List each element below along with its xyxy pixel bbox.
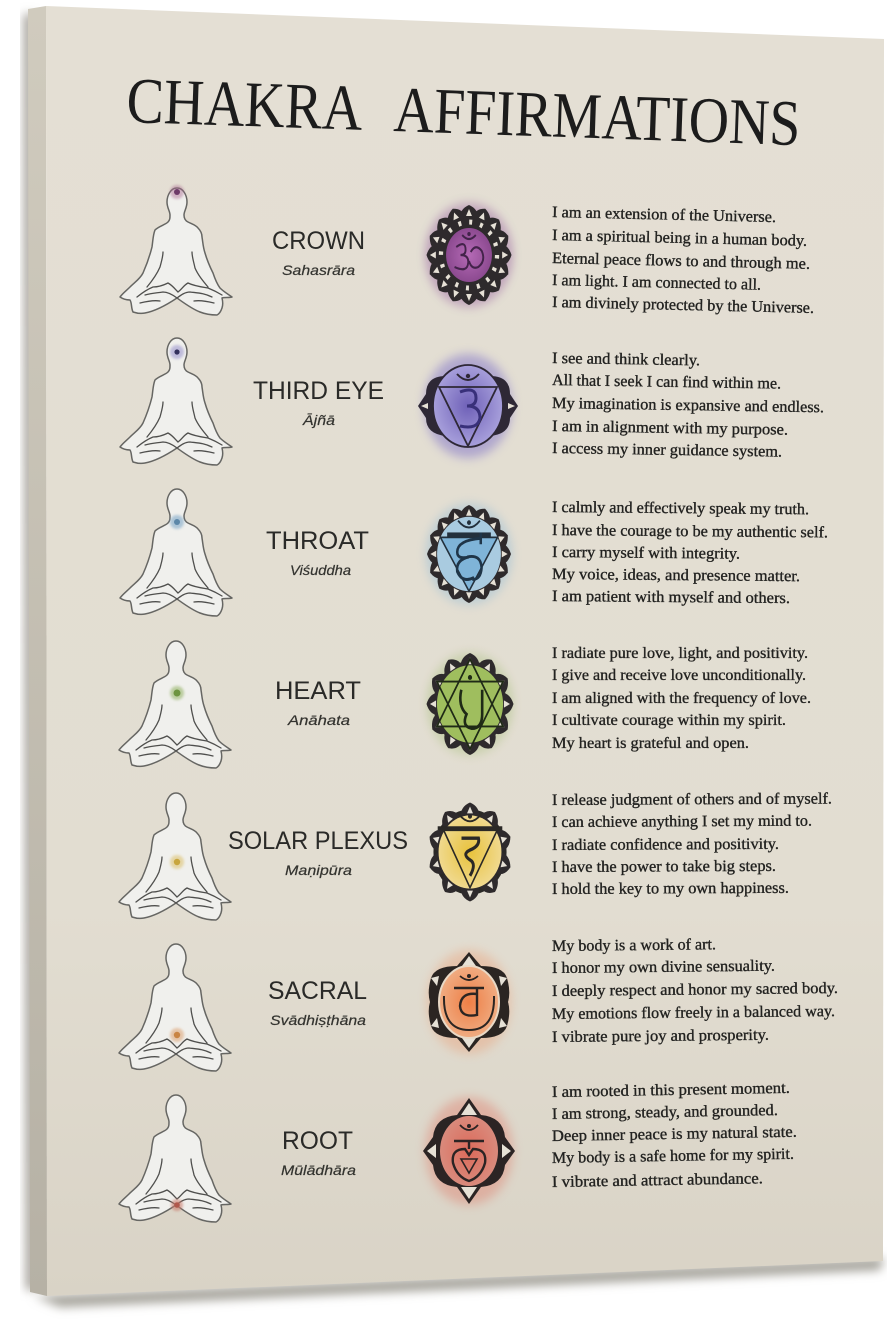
name: sacral: Svādhiṣṭhāna bbox=[270, 1012, 366, 1028]
figure: crown bbox=[120, 185, 232, 315]
name: root: ROOT bbox=[282, 1127, 353, 1155]
canvas side edge bbox=[28, 6, 47, 1296]
name: solar plexus bbox=[228, 827, 408, 878]
icon: throat mandala bbox=[425, 503, 513, 605]
name: throat bbox=[266, 527, 369, 578]
affirmations: root bbox=[552, 1080, 797, 1191]
row: third eye bbox=[120, 338, 824, 465]
affirmations: crown: I am light. I am connected to all. bbox=[552, 272, 761, 294]
affirmations: root: Deep inner peace is my natural state. bbox=[552, 1124, 797, 1145]
name: throat: THROAT bbox=[266, 527, 369, 555]
affirmations: root: My body is a safe home for my spirit. bbox=[552, 1146, 794, 1167]
affirmations: throat bbox=[552, 499, 828, 607]
affirmations: sacral: I deeply respect and honor my sacred body. bbox=[552, 980, 838, 1000]
name: solar plexus: SOLAR PLEXUS bbox=[228, 827, 408, 855]
name: third eye bbox=[253, 377, 384, 428]
row: crown bbox=[120, 185, 814, 317]
affirmations: solar plexus: I have the power to take big steps. bbox=[552, 858, 776, 876]
name: sacral bbox=[268, 977, 367, 1028]
affirmations: heart: I radiate pure love, light, and positivity. bbox=[552, 645, 808, 662]
affirmations: sacral: I honor my own divine sensuality. bbox=[552, 958, 775, 977]
figure: third eye bbox=[120, 338, 232, 465]
affirmations: heart bbox=[552, 645, 811, 752]
affirmations: throat: My voice, ideas, and presence matter. bbox=[552, 566, 800, 585]
icon: solar plexus mandala bbox=[427, 802, 513, 902]
row: sacral bbox=[119, 936, 838, 1071]
affirmations: heart: I am aligned with the frequency of love. bbox=[552, 690, 811, 707]
affirmations: crown: I am a spiritual being in a human body. bbox=[552, 227, 807, 250]
title: AFFIRMATIONS bbox=[392, 74, 802, 160]
affirmations: crown bbox=[552, 204, 814, 317]
affirmations: root: I am strong, steady, and grounded. bbox=[552, 1102, 778, 1123]
affirmations: sacral: I vibrate pure joy and prosperity. bbox=[552, 1027, 769, 1046]
icon: crown mandala bbox=[425, 203, 513, 307]
affirmations: throat: I calmly and effectively speak my truth. bbox=[552, 499, 809, 518]
name: root: Mūlādhāra bbox=[281, 1162, 356, 1178]
name: third eye: THIRD EYE bbox=[253, 377, 384, 405]
figure: throat bbox=[120, 489, 232, 616]
affirmations: crown: I am an extension of the Universe. bbox=[552, 204, 776, 226]
figure: root bbox=[119, 1095, 231, 1222]
affirmations: solar plexus: I radiate confidence and positivity. bbox=[552, 836, 779, 854]
figure: heart bbox=[119, 641, 231, 768]
name: crown: CROWN bbox=[272, 227, 365, 255]
affirmations: root: I am rooted in this present moment. bbox=[552, 1080, 790, 1101]
row: heart bbox=[119, 641, 811, 768]
row: throat bbox=[120, 489, 828, 616]
affirmations: third eye: My imagination is expansive and endless. bbox=[552, 395, 824, 416]
row: solar plexus bbox=[119, 791, 832, 920]
figure: solar plexus bbox=[119, 793, 231, 920]
name: third eye: Ājñā bbox=[302, 412, 335, 428]
affirmations: heart: I cultivate courage within my spirit. bbox=[552, 712, 786, 729]
name: sacral: SACRAL bbox=[268, 977, 367, 1005]
affirmations: third eye: I am in alignment with my purpose. bbox=[552, 418, 788, 439]
affirmations: third eye: I see and think clearly. bbox=[552, 350, 700, 369]
icon: root mandala bbox=[423, 1097, 515, 1205]
figure: sacral bbox=[119, 944, 231, 1071]
icon: sacral mandala bbox=[427, 950, 511, 1054]
affirmations: crown: I am divinely protected by the Universe. bbox=[552, 294, 814, 317]
affirmations: heart: I give and receive love unconditionally. bbox=[552, 667, 806, 684]
name: throat: Viśuddha bbox=[290, 562, 351, 578]
affirmations: third eye: All that I seek I can find within me. bbox=[552, 372, 781, 393]
name: solar plexus: Maṇipūra bbox=[285, 862, 352, 878]
name: heart: HEART bbox=[275, 677, 361, 705]
affirmations: solar plexus: I can achieve anything I set my mind to. bbox=[552, 813, 812, 831]
icon: third eye mandala bbox=[418, 354, 518, 458]
affirmations: root: I vibrate and attract abundance. bbox=[552, 1170, 763, 1191]
title bbox=[126, 65, 802, 160]
name: crown: Sahasrāra bbox=[282, 262, 355, 278]
row: root bbox=[119, 1080, 797, 1222]
affirmations: throat: I have the courage to be my authentic self. bbox=[552, 522, 828, 541]
affirmations: heart: My heart is grateful and open. bbox=[552, 735, 749, 752]
affirmations: crown: Eternal peace flows to and through me. bbox=[552, 250, 810, 273]
affirmations: throat: I am patient with myself and others. bbox=[552, 588, 790, 607]
name: heart: Anāhata bbox=[287, 712, 350, 728]
name: crown bbox=[272, 227, 365, 278]
affirmations: sacral: My body is a work of art. bbox=[552, 936, 716, 955]
affirmations: solar plexus bbox=[552, 791, 832, 898]
name: root bbox=[281, 1127, 356, 1178]
name: heart bbox=[275, 677, 361, 728]
affirmations: third eye: I access my inner guidance system. bbox=[552, 440, 782, 461]
affirmations: solar plexus: I release judgment of others and of myself. bbox=[552, 791, 832, 809]
icon: heart mandala bbox=[426, 653, 514, 755]
affirmations: sacral bbox=[552, 936, 838, 1046]
affirmations: throat: I carry myself with integrity. bbox=[552, 544, 740, 563]
affirmations: solar plexus: I hold the key to my own happiness. bbox=[552, 880, 789, 898]
title: CHAKRA bbox=[126, 65, 364, 145]
affirmations: sacral: My emotions flow freely in a balanced way. bbox=[552, 1003, 835, 1023]
affirmations: third eye bbox=[552, 350, 824, 461]
